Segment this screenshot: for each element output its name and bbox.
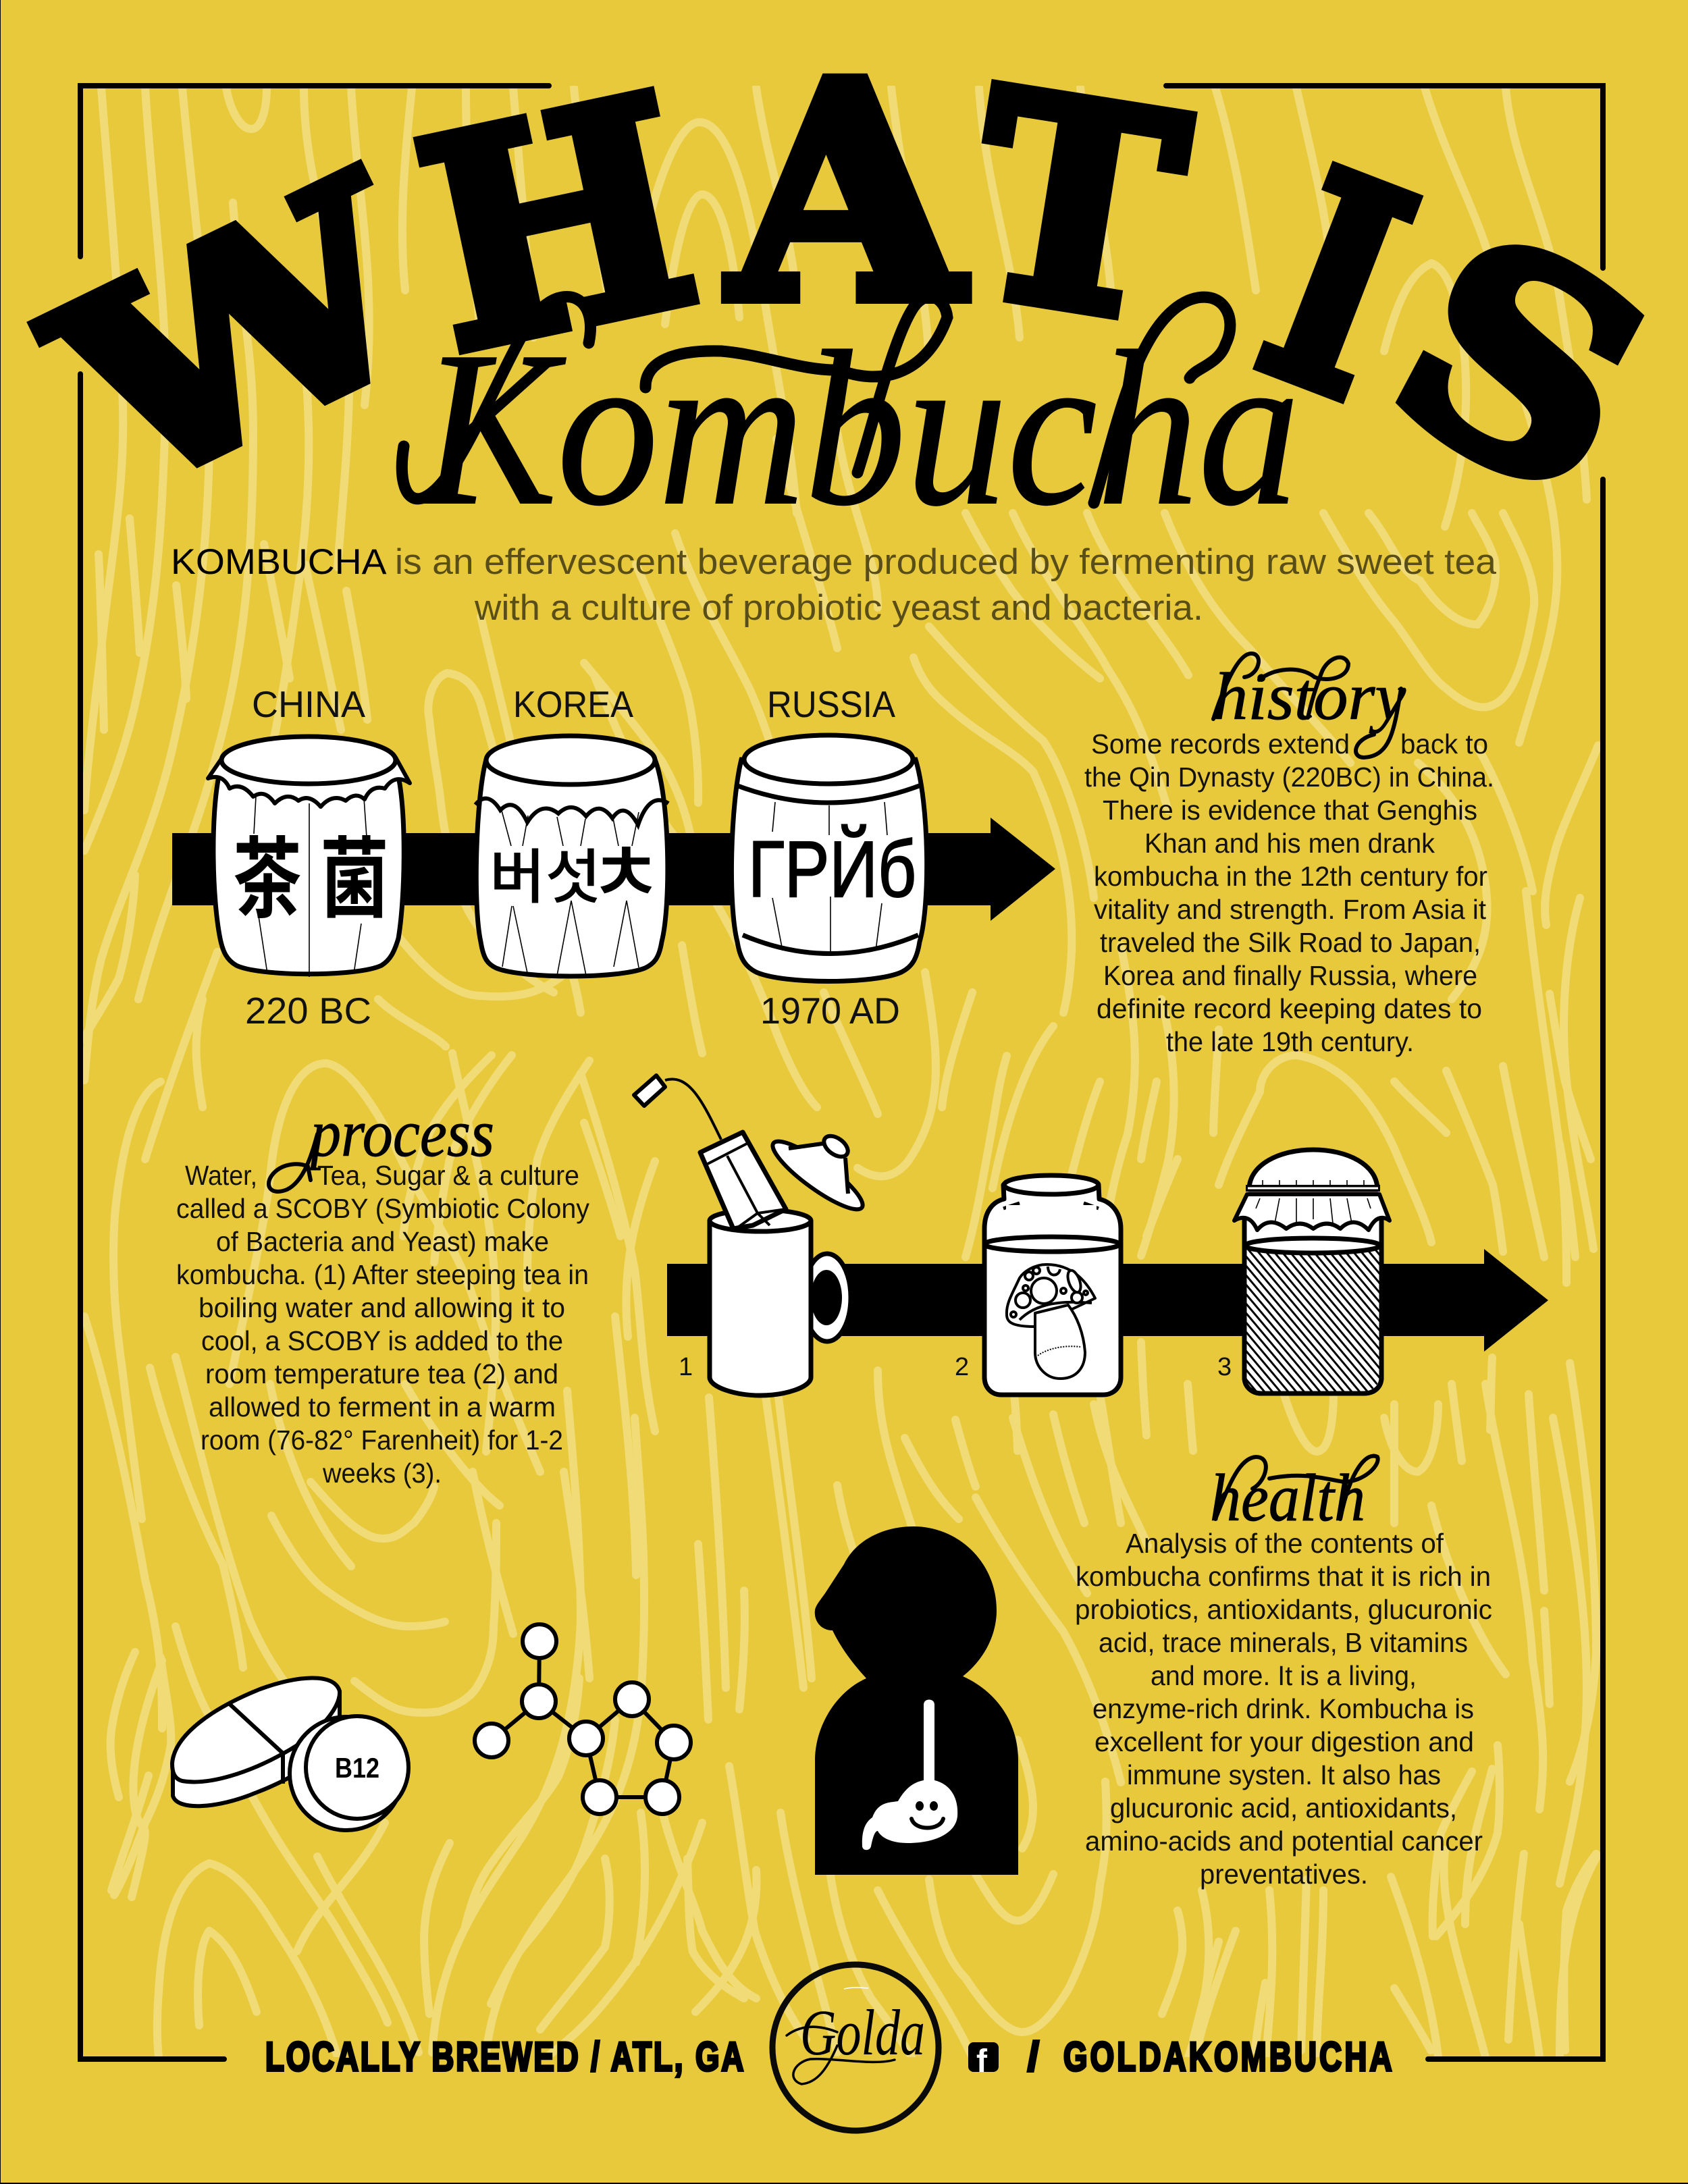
health text: immune systen. It also has: [1127, 1759, 1441, 1790]
health text: Analysis of the contents of: [1126, 1528, 1444, 1559]
health text: preventatives.: [1200, 1859, 1368, 1890]
history text: vitality and strength. From Asia it: [1094, 894, 1487, 925]
history text: the late 19th century.: [1166, 1026, 1414, 1057]
label RUSSIA: RUSSIA: [767, 683, 895, 725]
intro line 1: KOMBUCHA is an effervescent beverage produced by fermenting raw sweet tea: [171, 542, 1497, 582]
label CHINA: CHINA: [252, 683, 365, 725]
label KOREA: KOREA: [513, 683, 633, 725]
pills and b12: [172, 1678, 408, 1830]
title: Kombucha script: [402, 297, 1300, 551]
process text: Tea, Sugar & a culture: [317, 1160, 579, 1191]
title: WHAT IS: [11, 19, 1688, 560]
letter T: T: [952, 29, 1202, 386]
icon: tablet: [172, 1678, 340, 1806]
history text: Korea and finally Russia, where: [1103, 960, 1477, 991]
health text: kombucha confirms that it is rich in: [1076, 1561, 1491, 1592]
process text: called a SCOBY (Symbiotic Colony: [176, 1193, 589, 1224]
process arrow: [667, 1249, 1548, 1352]
history text: There is evidence that Genghis: [1103, 795, 1477, 826]
health text: probiotics, antioxidants, glucuronic: [1075, 1594, 1492, 1625]
social handle: GOLDAKOMBUCHA: [1063, 2035, 1392, 2080]
date 1970 AD: 1970 AD: [760, 990, 900, 1032]
icon: b12 coin: B12: [335, 1752, 379, 1784]
korean characters: ㅊ: [589, 829, 663, 920]
korean characters: [490, 829, 663, 920]
heading history: history: [1213, 659, 1406, 734]
stomach: [862, 1700, 957, 1850]
process text: cool, a SCOBY is added to the: [201, 1325, 563, 1356]
china characters: 菌: [320, 830, 389, 929]
word Kombucha: Kombucha: [419, 306, 1300, 551]
process text: room temperature tea (2) and: [205, 1358, 558, 1389]
history timeline: [172, 683, 1055, 1032]
icon: fermenting jar: [1234, 1150, 1390, 1393]
icon: facebook: f: [976, 2044, 988, 2079]
history text: kombucha in the 12th century for: [1094, 861, 1487, 892]
process text: of Bacteria and Yeast) make: [216, 1226, 549, 1257]
letter A: A: [726, 19, 968, 367]
history section: [1084, 654, 1494, 1057]
icon: b12 coin: [290, 1716, 408, 1830]
process diagram: [634, 1075, 1548, 1395]
health text: glucuronic acid, antioxidants,: [1110, 1792, 1457, 1823]
process text: kombucha. (1) After steeping tea in: [176, 1259, 589, 1290]
logo badge: [772, 1965, 939, 2131]
icon: person with stomach: [815, 1526, 1018, 1875]
icon: lid: [766, 1132, 870, 1219]
process text: Water,: [185, 1160, 257, 1191]
heading process: [269, 1096, 494, 1192]
heading health: health: [1210, 1460, 1365, 1535]
history text: Khan and his men drank: [1144, 828, 1435, 859]
letter W: W: [11, 118, 471, 556]
china barrel: [208, 737, 410, 977]
korea barrel: [475, 736, 668, 976]
process text: [176, 1160, 589, 1489]
russian word: ГРЙб: [748, 824, 916, 914]
russia barrel: [731, 735, 927, 982]
mushroom: [1007, 1264, 1095, 1379]
health text: amino-acids and potential cancer: [1085, 1826, 1483, 1857]
history text: Some records extend: [1091, 728, 1350, 760]
china characters: 茶: [233, 830, 302, 929]
letter S: S: [1348, 170, 1688, 560]
health text: enzyme-rich drink. Kombucha is: [1092, 1693, 1474, 1724]
history text: [1084, 728, 1494, 1057]
icon: mug with tea bag: [634, 1075, 851, 1395]
process text: allowed to ferment in a warm: [209, 1391, 556, 1422]
letter H: H: [396, 33, 718, 416]
letter I: I: [1226, 109, 1447, 462]
logo badge: Golda: [800, 1996, 925, 2069]
health section: [1075, 1456, 1492, 1890]
timeline arrow: [172, 818, 1055, 921]
heading process: process: [307, 1096, 494, 1171]
health text: acid, trace minerals, B vitamins: [1099, 1627, 1468, 1658]
process text: boiling water and allowing it to: [199, 1292, 565, 1323]
icon: facebook: [968, 2042, 999, 2079]
social handle: /: [1028, 2034, 1039, 2079]
process text: room (76-82° Farenheit) for 1-2: [201, 1424, 563, 1456]
step number 3: 3: [1217, 1353, 1232, 1381]
swashes: [402, 297, 1230, 503]
process section: [176, 1096, 589, 1489]
history text: definite record keeping dates to: [1097, 993, 1482, 1024]
intro line 2: with a culture of probiotic yeast and bacteria.: [474, 588, 1203, 628]
history text: traveled the Silk Road to Japan,: [1100, 927, 1481, 958]
tagline: LOCALLY BREWED / ATL, GA: [265, 2035, 743, 2080]
icon: jar with scoby: [984, 1175, 1121, 1395]
korean characters: 버섯: [490, 844, 601, 911]
intro paragraph: [171, 542, 1497, 628]
icon: molecule: [475, 1624, 691, 1814]
process text: weeks (3).: [322, 1458, 442, 1489]
date 220 BC: 220 BC: [245, 990, 371, 1032]
footer: [265, 1965, 1392, 2131]
history text: the Qin Dynasty (220BC) in China.: [1084, 762, 1494, 793]
step number 2: 2: [955, 1353, 969, 1381]
health text: [1075, 1528, 1492, 1890]
china characters: [233, 830, 389, 929]
history text: back to: [1400, 728, 1488, 760]
health text: excellent for your digestion and: [1094, 1726, 1474, 1757]
step number 1: 1: [679, 1353, 693, 1381]
health text: and more. It is a living,: [1151, 1660, 1417, 1691]
